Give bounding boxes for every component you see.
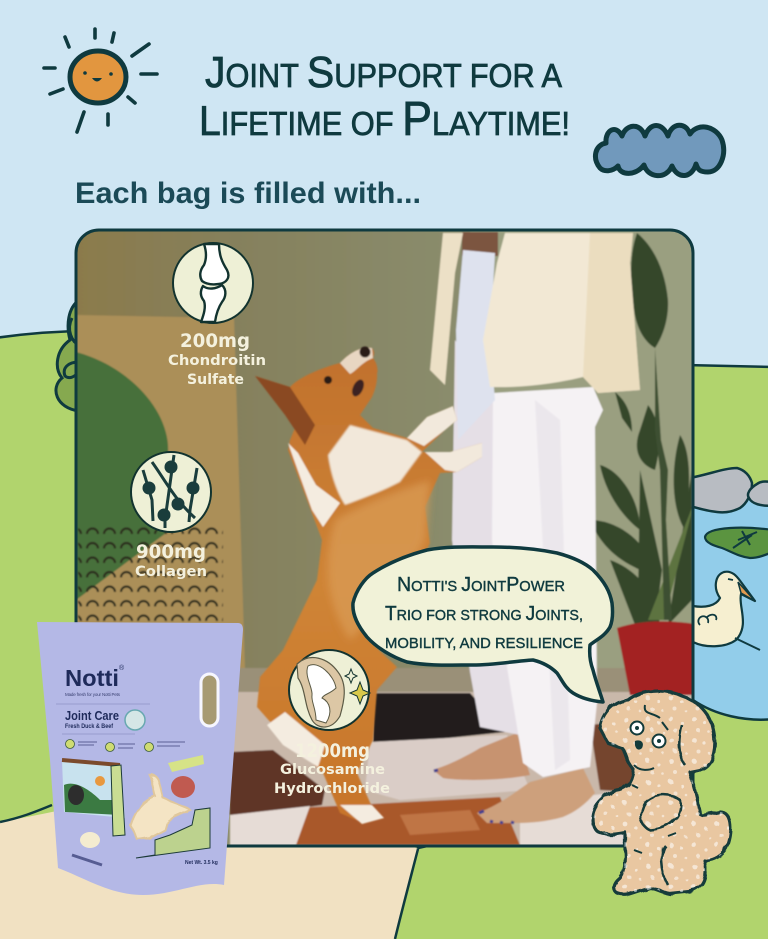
ingredient: glucosamine: Glucosamine [280, 762, 385, 778]
sun icon [44, 29, 157, 132]
pale rug [365, 735, 530, 800]
speech bubble: NOTTI'S JOINTPOWER [397, 574, 565, 596]
corgi paws [407, 406, 482, 472]
plant leaves [590, 233, 692, 630]
corgi rear white [267, 712, 384, 824]
ingredient: chondroitin: Sulfate [187, 372, 244, 388]
pond [690, 490, 768, 720]
title: JOINT SUPPORT FOR A [205, 48, 562, 97]
title [199, 48, 570, 146]
plant pot [617, 621, 695, 695]
back foot [433, 733, 530, 780]
corgi [255, 346, 482, 824]
ingredient: chondroitin [168, 243, 266, 388]
dark rug right [592, 723, 632, 792]
bush behind card [56, 300, 79, 411]
scallop pattern [78, 526, 224, 622]
pale floor bottom [229, 794, 624, 844]
green arch [76, 352, 170, 600]
rust highlights [400, 810, 480, 835]
ingredient: glucosamine [274, 650, 390, 797]
ingredient: glucosamine: 1200mg [295, 740, 370, 762]
bag illustration: Net Wt. 3.5 kg [185, 860, 218, 866]
speech bubble: MOBILITY, AND RESILIENCE [385, 635, 583, 652]
ingredient: chondroitin: Chondroitin [168, 353, 266, 369]
title: LIFETIME OF PLAYTIME! [199, 93, 570, 146]
shirt shade [583, 233, 640, 393]
cream ground [0, 788, 418, 939]
product bag: ® [119, 664, 125, 672]
neck skin [462, 232, 498, 256]
product bag: Fresh Duck & Beef [65, 723, 114, 730]
bag handle slot [201, 674, 218, 726]
black mat [373, 693, 505, 745]
left green hill [0, 331, 420, 939]
trouser fold [535, 400, 570, 770]
corgi neck blaze [288, 443, 340, 527]
ingredient: collagen: 900mg [136, 541, 206, 563]
bag illustration [62, 755, 218, 866]
speech bubble [353, 547, 613, 702]
shirt left flap [430, 233, 463, 385]
bib overalls [455, 248, 496, 402]
shirt main [483, 233, 640, 393]
rocks [690, 468, 768, 512]
corgi chest [328, 425, 422, 505]
speech bubble: TRIO FOR STRONG JOINTS, [385, 603, 583, 625]
toenails [434, 770, 514, 823]
front trouser leg [492, 387, 603, 777]
bag checkmarks [66, 740, 185, 752]
corgi fur light [328, 480, 430, 640]
poodle eyes [630, 722, 644, 734]
ingredient: glucosamine: Hydrochloride [274, 781, 390, 797]
corgi ear [255, 376, 315, 445]
photo wall [76, 230, 476, 690]
back trouser leg [452, 340, 520, 735]
poodle [592, 691, 731, 895]
ground outline [0, 805, 418, 939]
cloud [595, 125, 724, 176]
lily pad [705, 528, 768, 558]
cardboard panel [76, 315, 246, 700]
ingredient: collagen: Collagen [135, 564, 207, 580]
floor [230, 690, 695, 850]
corgi muzzle [340, 348, 373, 374]
right green hill [390, 364, 768, 939]
photo panel [76, 230, 695, 850]
panel border [76, 230, 693, 846]
ingredient: collagen [131, 452, 211, 580]
product bag [37, 622, 243, 895]
duck [693, 572, 760, 650]
front foot [477, 768, 595, 823]
bag product name: Joint Care [65, 708, 119, 723]
ingredient: chondroitin: 200mg [180, 330, 250, 352]
product bag: Made fresh for your Notti Pets [65, 692, 121, 697]
dark rug left [230, 750, 325, 818]
rust rug [293, 797, 520, 845]
subheading: Each bag is filled with... [75, 177, 421, 210]
bag logo: Notti [65, 665, 119, 691]
